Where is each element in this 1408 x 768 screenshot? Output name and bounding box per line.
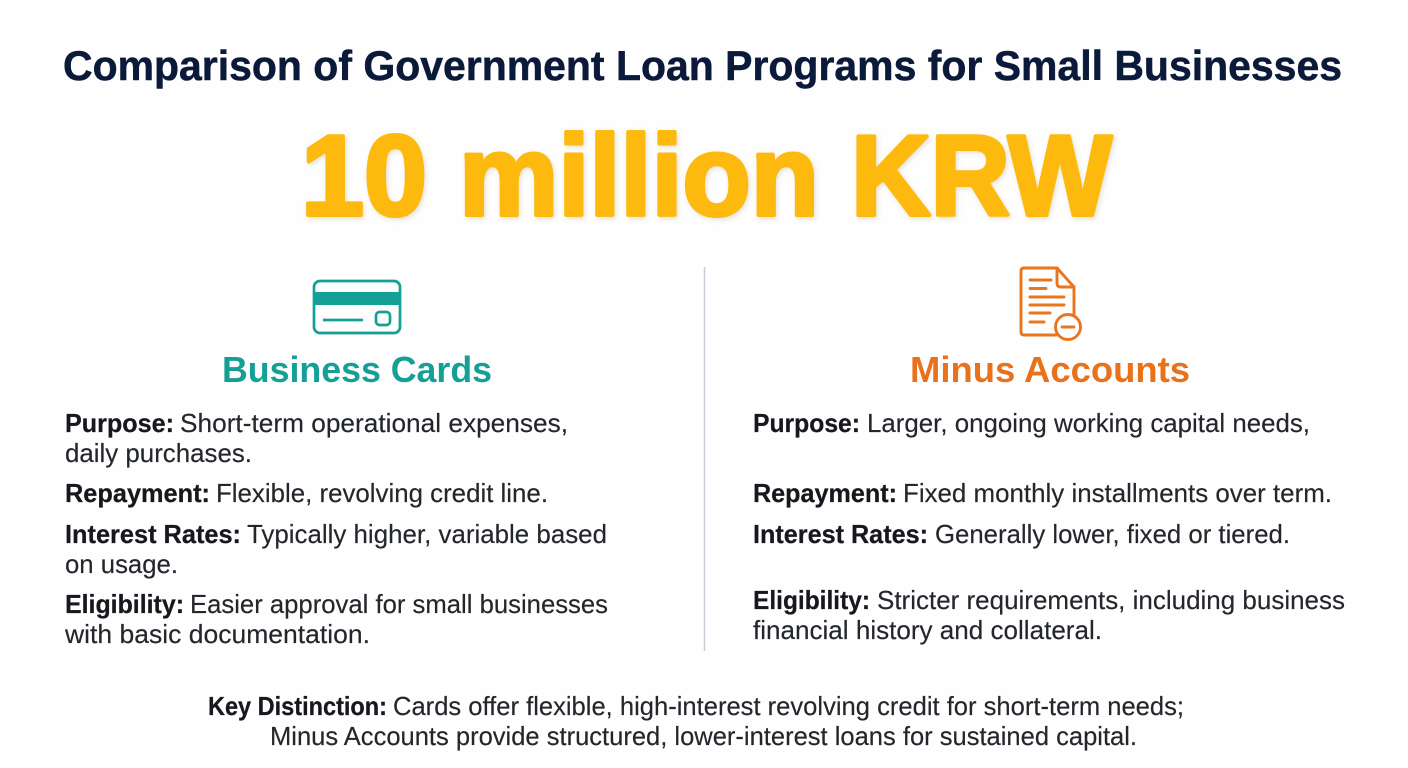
text: purpose bbox=[65, 408, 568, 468]
text: eligibility: Easier approval for small businesses bbox=[190, 589, 608, 619]
text: interest rates: on usage. bbox=[65, 549, 178, 579]
key distinction callout: Key Distinction: bbox=[208, 691, 387, 721]
text: eligibility bbox=[753, 585, 1345, 645]
key distinction callout: Cards offer flexible, high-interest revolving credit for short-term needs; bbox=[393, 691, 1184, 721]
text: interest rates: Typically higher, variable based bbox=[247, 519, 607, 549]
headline amount: 10 bbox=[301, 113, 427, 240]
text: interest rates: Interest Rates: bbox=[753, 519, 928, 549]
text: repayment: Fixed monthly installments over term. bbox=[903, 478, 1332, 508]
text: repayment: Flexible, revolving credit line. bbox=[216, 478, 548, 508]
text: repayment: Repayment: bbox=[753, 478, 897, 508]
text: eligibility: Eligibility: bbox=[65, 589, 184, 619]
text: interest rates: Generally lower, fixed or tiered. bbox=[935, 519, 1290, 549]
icon: document with minus bbox=[1021, 268, 1080, 340]
text: repayment: Repayment: bbox=[65, 478, 210, 508]
text: eligibility bbox=[64, 589, 608, 649]
text: eligibility: Eligibility: bbox=[753, 585, 870, 615]
heading: minus accounts: Minus Accounts bbox=[910, 349, 1190, 390]
heading: business cards: Business Cards bbox=[222, 349, 492, 390]
key distinction callout bbox=[208, 691, 1184, 751]
text: eligibility: with basic documentation. bbox=[64, 619, 370, 649]
text: interest rates: Interest Rates: bbox=[65, 519, 241, 549]
headline amount: million bbox=[459, 113, 819, 240]
text: eligibility: financial history and collateral. bbox=[753, 615, 1102, 645]
text: purpose: Purpose: bbox=[753, 408, 860, 438]
text: interest rates bbox=[753, 519, 1290, 549]
panel: minus accounts bbox=[753, 268, 1345, 645]
text: purpose: Larger, ongoing working capital needs, bbox=[867, 408, 1310, 438]
text: interest rates bbox=[65, 519, 607, 579]
icon: credit card bbox=[314, 281, 400, 333]
panel: business cards bbox=[64, 281, 608, 649]
headline amount: KRW bbox=[851, 113, 1112, 240]
center divider bbox=[704, 267, 706, 651]
key distinction callout: Minus Accounts provide structured, lower-interest loans for sustained capital. bbox=[270, 721, 1137, 751]
text: eligibility: Stricter requirements, including business bbox=[877, 585, 1345, 615]
title: Comparison of Government Loan Programs for Small Businesses bbox=[63, 42, 1342, 89]
text: purpose: Purpose: bbox=[65, 408, 174, 438]
text: purpose: daily purchases. bbox=[65, 438, 252, 468]
text: purpose: Short-term operational expenses, bbox=[180, 408, 568, 438]
text: repayment bbox=[65, 478, 548, 508]
headline amount bbox=[301, 113, 1112, 240]
